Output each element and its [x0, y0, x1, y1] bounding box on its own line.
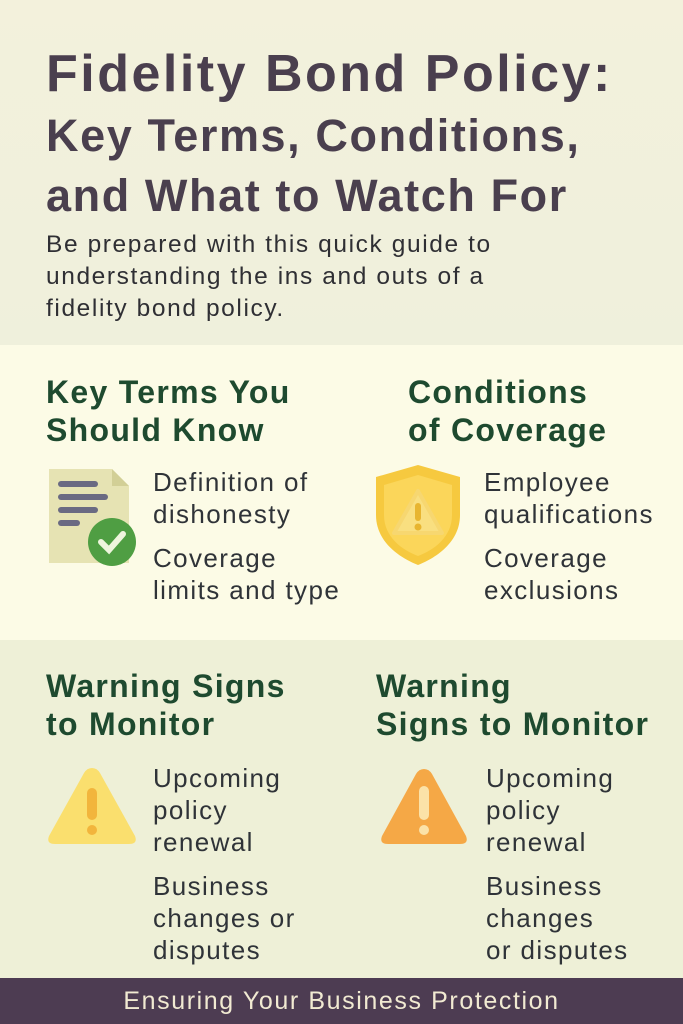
text: conditions items [484, 467, 654, 605]
heading: warning signs left [46, 668, 286, 742]
text: warning items right: or disputes [486, 935, 629, 965]
heading: conditions [408, 374, 607, 448]
heading: warning signs left: to Monitor [46, 706, 215, 742]
icon: document with check [49, 469, 136, 566]
heading: warning signs right [376, 668, 649, 742]
heading: conditions: Conditions [408, 374, 588, 410]
text: key terms items: Definition of [153, 467, 308, 497]
title: and What to Watch For [46, 170, 568, 221]
heading: key terms: Should Know [46, 412, 265, 448]
heading: key terms [46, 374, 291, 448]
panel: warning signs [0, 640, 683, 978]
text: key terms items [153, 467, 340, 605]
text: warning items right: renewal Business [486, 827, 603, 901]
text: conditions items: exclusions [484, 575, 619, 605]
text: warning items right: changes [486, 903, 594, 933]
text: warning items left: renewal Business [153, 827, 270, 901]
subtitle [46, 231, 492, 322]
title [46, 45, 613, 221]
text: warning items left: disputes [153, 935, 261, 965]
subtitle: Be prepared with this quick guide to [46, 231, 492, 258]
text: warning items right: policy [486, 795, 561, 825]
heading: key terms: Key Terms You [46, 374, 291, 410]
text: key terms items: dishonesty Coverage [153, 499, 291, 573]
text: conditions items: Employee [484, 467, 611, 497]
icon: yellow warning triangle [48, 768, 136, 844]
text: warning items left: Upcoming [153, 763, 281, 793]
panel: key terms and conditions [0, 345, 683, 640]
title: Key Terms, Conditions, [46, 110, 580, 161]
subtitle: understanding the ins and outs of a [46, 263, 485, 290]
text: conditions items: qualifications Coverage [484, 499, 654, 573]
icon: shield with warning [376, 465, 460, 565]
text: key terms items: limits and type [153, 575, 340, 605]
panel: header [0, 0, 683, 345]
heading: warning signs left: Warning Signs [46, 668, 286, 704]
footer: Ensuring Your Business Protection [123, 987, 560, 1015]
footer [0, 978, 683, 1024]
heading: warning signs right: Warning [376, 668, 512, 704]
subtitle: fidelity bond policy. [46, 295, 285, 322]
heading: conditions: of Coverage [408, 412, 607, 448]
icon: orange warning triangle [381, 769, 467, 844]
heading: warning signs right: Signs to Monitor [376, 706, 649, 742]
text: warning items right [486, 763, 629, 965]
text: warning items left: policy [153, 795, 228, 825]
text: warning items right: Upcoming [486, 763, 614, 793]
text: warning items left: changes or [153, 903, 296, 933]
text: warning items left [153, 763, 296, 965]
title: Fidelity Bond Policy: [46, 45, 613, 103]
